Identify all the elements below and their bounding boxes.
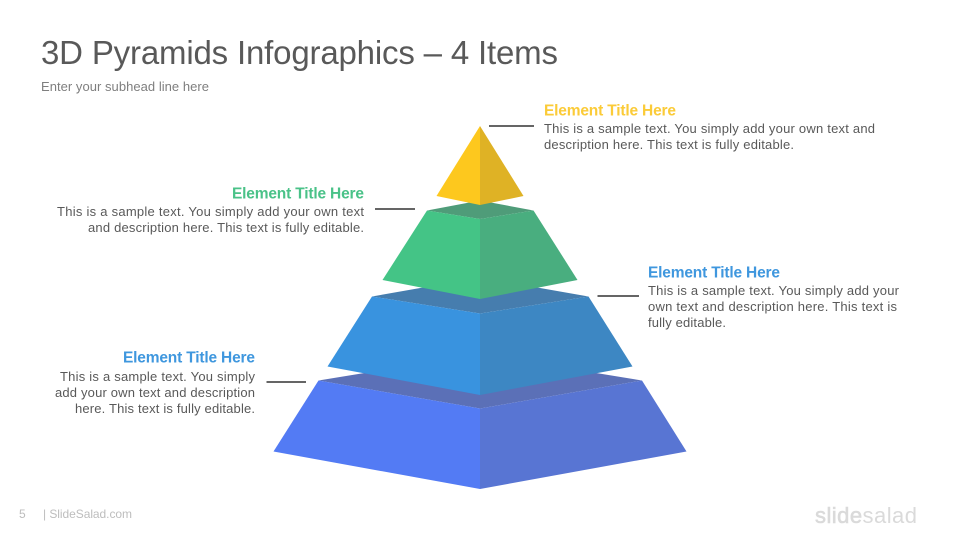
text block: yellow item: description here. This text is fully editable. [544, 137, 794, 152]
text block: blue item [648, 264, 900, 330]
text block: indigo item: This is a sample text. You simply [60, 369, 256, 384]
text block: indigo item [55, 350, 256, 416]
connector: indigo item [266, 381, 306, 383]
text block: green item: This is a sample text. You simply add your own text [57, 204, 364, 219]
subhead: Enter your subhead line here [41, 79, 209, 94]
connector: blue item [598, 295, 639, 297]
tier 1: yellow apex [436, 126, 524, 205]
pyramid [274, 126, 686, 489]
tier 3: blue [328, 278, 632, 395]
text block: yellow item: Element Title Here [544, 102, 676, 120]
connector: yellow item [489, 125, 534, 127]
text block: indigo item: here. This text is fully editable. [75, 401, 255, 416]
text block: blue item: Element Title Here [648, 264, 780, 282]
tier 4: indigo base [274, 354, 686, 489]
footer site name: | SlideSalad.com [43, 507, 132, 521]
text block: blue item: fully editable. [648, 315, 726, 330]
title: 3D Pyramids Infographics – 4 Items [41, 34, 558, 71]
logo wordmark: slidesalad [815, 503, 917, 528]
text block: indigo item: Element Title Here [123, 350, 255, 366]
connector: green item [375, 208, 415, 210]
text block: indigo item: add your own text and description [55, 385, 255, 400]
text block: yellow item [544, 102, 875, 152]
text block: green item: Element Title Here [232, 186, 364, 202]
text block: blue item: own text and description here. This text is [648, 299, 898, 314]
text block: blue item: This is a sample text. You simply add your [648, 283, 900, 298]
text block: yellow item: This is a sample text. You simply add your own text and [544, 121, 875, 136]
tier 2: green [382, 200, 578, 299]
text block: green item: and description here. This text is fully editable. [88, 220, 364, 235]
text block: green item [57, 186, 364, 235]
page number: 5 [19, 507, 26, 521]
